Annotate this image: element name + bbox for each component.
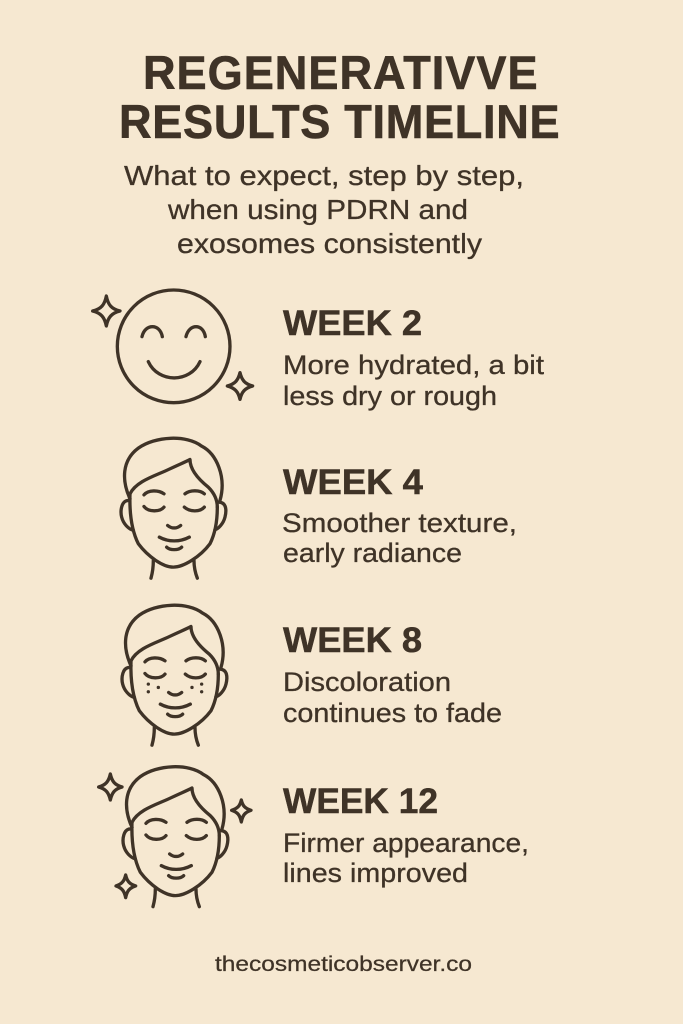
week 8 text: continues to fade bbox=[283, 698, 502, 728]
week 12 text: lines improved bbox=[283, 858, 468, 888]
icon: face week 12 with sparkles bbox=[123, 767, 228, 907]
week 2 text bbox=[283, 304, 545, 411]
week 12 text: WEEK 12 bbox=[283, 782, 438, 821]
week 12 text bbox=[283, 782, 529, 888]
subtitle: exosomes consistently bbox=[177, 228, 482, 259]
subtitle: when using PDRN and bbox=[167, 194, 468, 225]
icon: discoloration dots bbox=[147, 682, 203, 693]
week 4 text: Smoother texture, bbox=[282, 508, 517, 538]
week 8 text: WEEK 8 bbox=[283, 621, 422, 660]
week 2 text: More hydrated, a bit bbox=[283, 350, 545, 380]
week 2 text: less dry or rough bbox=[283, 381, 497, 411]
icon: face week 4 bbox=[121, 438, 226, 578]
week 8 text bbox=[283, 621, 502, 728]
title: RESULTS TIMELINE bbox=[119, 95, 560, 148]
title bbox=[119, 46, 560, 148]
title: REGENERATIVVE bbox=[143, 46, 538, 99]
week 4 text bbox=[282, 463, 517, 568]
icon: sparkles week 12 bbox=[99, 774, 251, 898]
subtitle bbox=[124, 160, 524, 259]
week 12 text: Firmer appearance, bbox=[283, 828, 529, 858]
icon: smiling face with sparkles bbox=[93, 290, 253, 403]
week 2 text: WEEK 2 bbox=[283, 304, 422, 343]
week 4 text: early radiance bbox=[283, 538, 462, 568]
footer website: thecosmeticobserver.co bbox=[215, 953, 472, 976]
week 8 text: Discoloration bbox=[283, 667, 451, 697]
week 4 text: WEEK 4 bbox=[283, 463, 424, 502]
icon: face week 8 with spots bbox=[122, 605, 227, 745]
subtitle: What to expect, step by step, bbox=[124, 160, 524, 191]
